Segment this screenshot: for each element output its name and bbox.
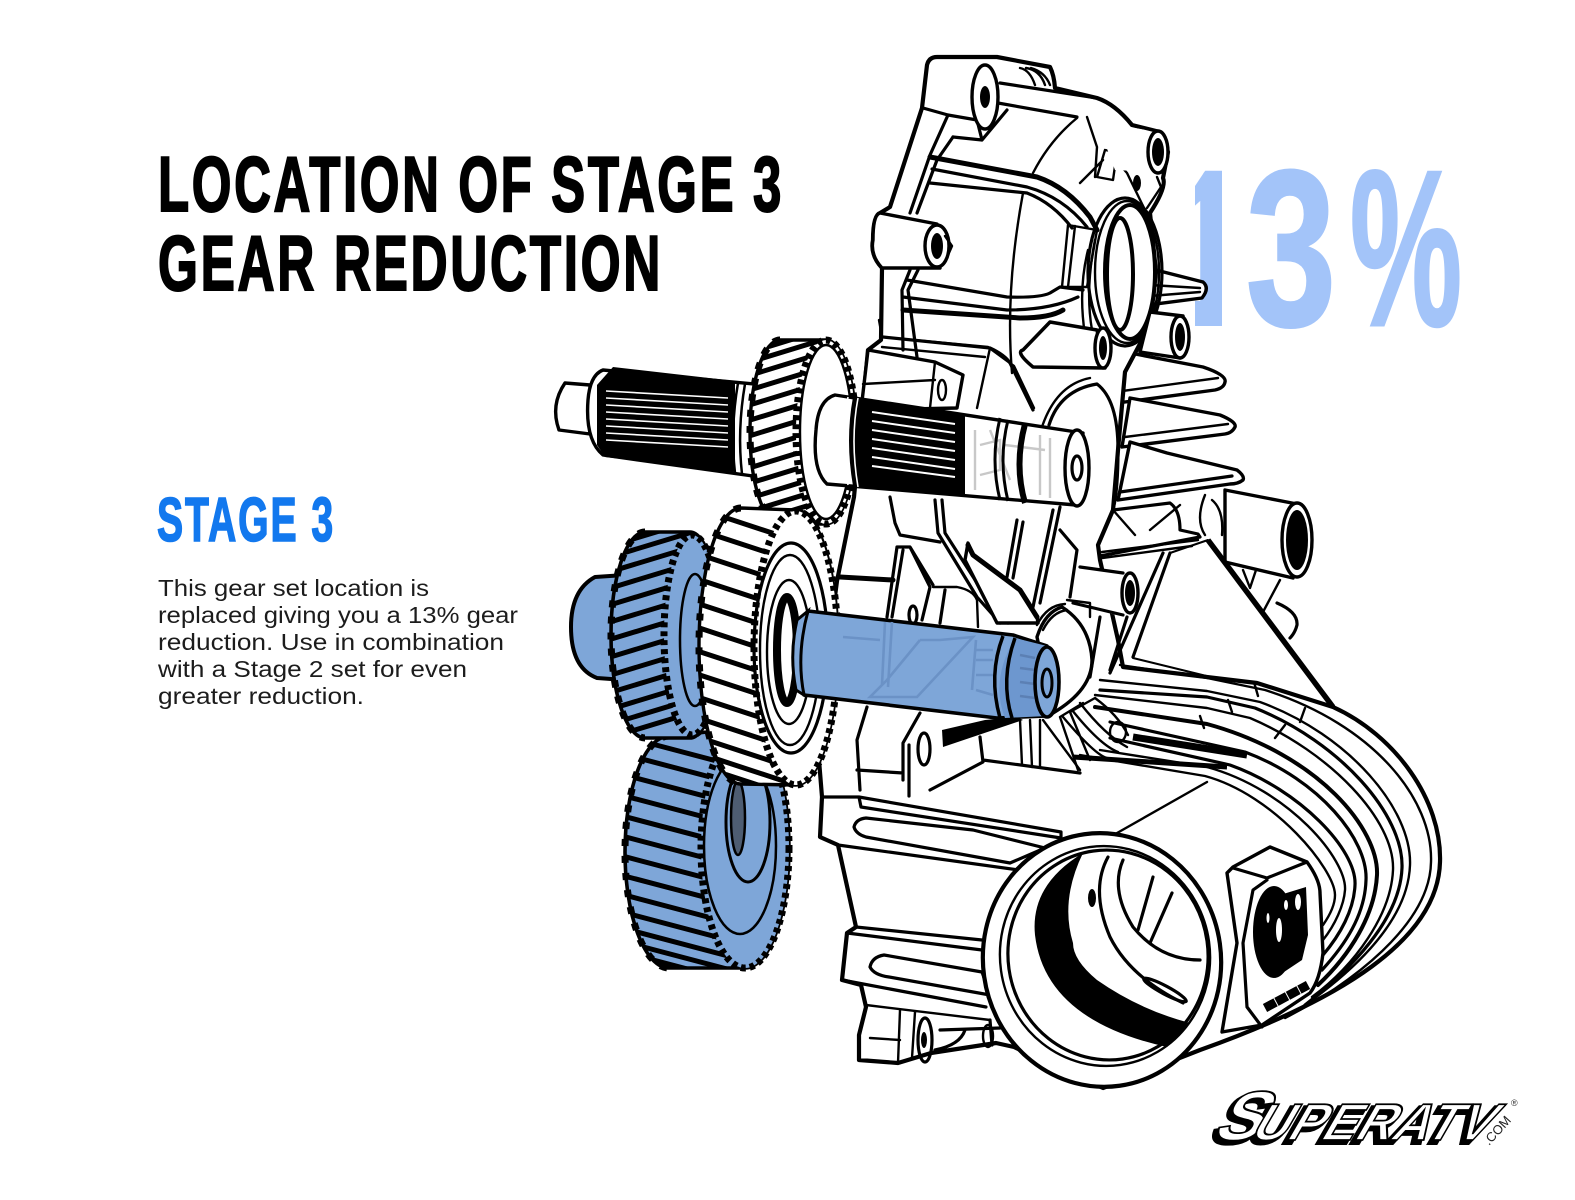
housing: mounting foot — [866, 1005, 1000, 1063]
logo: SuperATV — [1197, 1078, 1522, 1159]
big percentage — [1195, 168, 1460, 329]
subheading: stage 3: STAGE 3 — [157, 486, 335, 555]
transaxle housing — [819, 57, 1440, 1102]
housing: lower flange and slots — [820, 782, 1207, 1007]
housing: logo plate — [1222, 847, 1323, 1032]
housing: rear cylinder and brace — [1133, 490, 1333, 707]
housing: middle webs — [840, 497, 1128, 796]
highlighted blue output shaft — [793, 611, 1059, 718]
title: LOCATION OF STAGE 3 — [158, 140, 784, 228]
housing: output ring — [1088, 198, 1162, 346]
description text: reduction. Use in combination — [158, 629, 504, 655]
logo: SuperATV: .COM — [1480, 1113, 1514, 1148]
description text: greater reduction. — [158, 683, 364, 709]
logo: SuperATV: S — [1201, 1078, 1292, 1156]
big percentage: % — [1350, 125, 1462, 373]
housing: cross member — [879, 320, 1222, 677]
housing: hatched junction — [1060, 698, 1128, 770]
logo: SuperATV: ® — [1511, 1098, 1518, 1108]
upper input shaft — [556, 367, 765, 477]
housing: upper ribs — [882, 83, 1161, 410]
lower blue gear — [622, 730, 792, 972]
logo: SuperATV: UPERATV — [1242, 1093, 1514, 1151]
housing: cooling fins — [1110, 266, 1243, 500]
upper blue gear and stub — [569, 528, 708, 742]
title — [158, 140, 784, 307]
title: GEAR REDUCTION — [158, 219, 663, 307]
big percentage: 1 — [1166, 125, 1250, 373]
description text: This gear set location is — [158, 575, 429, 601]
upper countershaft — [815, 395, 1089, 506]
big percentage: 3 — [1246, 125, 1336, 373]
housing: large output opening — [966, 818, 1238, 1102]
description text — [157, 575, 518, 709]
upper white gear — [746, 336, 858, 528]
housing: lower bosses — [861, 312, 1189, 640]
ghosted housing lines seen through shaft — [843, 622, 993, 697]
description text: with a Stage 2 set for even — [157, 656, 467, 682]
housing: mounting bosses — [872, 65, 1168, 268]
logo: SuperATV: S — [1197, 1081, 1288, 1159]
housing: main body — [819, 57, 1440, 1088]
description text: replaced giving you a 13% gear — [158, 602, 518, 628]
logo: SuperATV: UPERATV — [1238, 1096, 1510, 1154]
housing: belt cover ribs — [1073, 665, 1431, 1018]
middle white gear — [696, 504, 840, 788]
logo plate emblem — [1253, 886, 1308, 1008]
